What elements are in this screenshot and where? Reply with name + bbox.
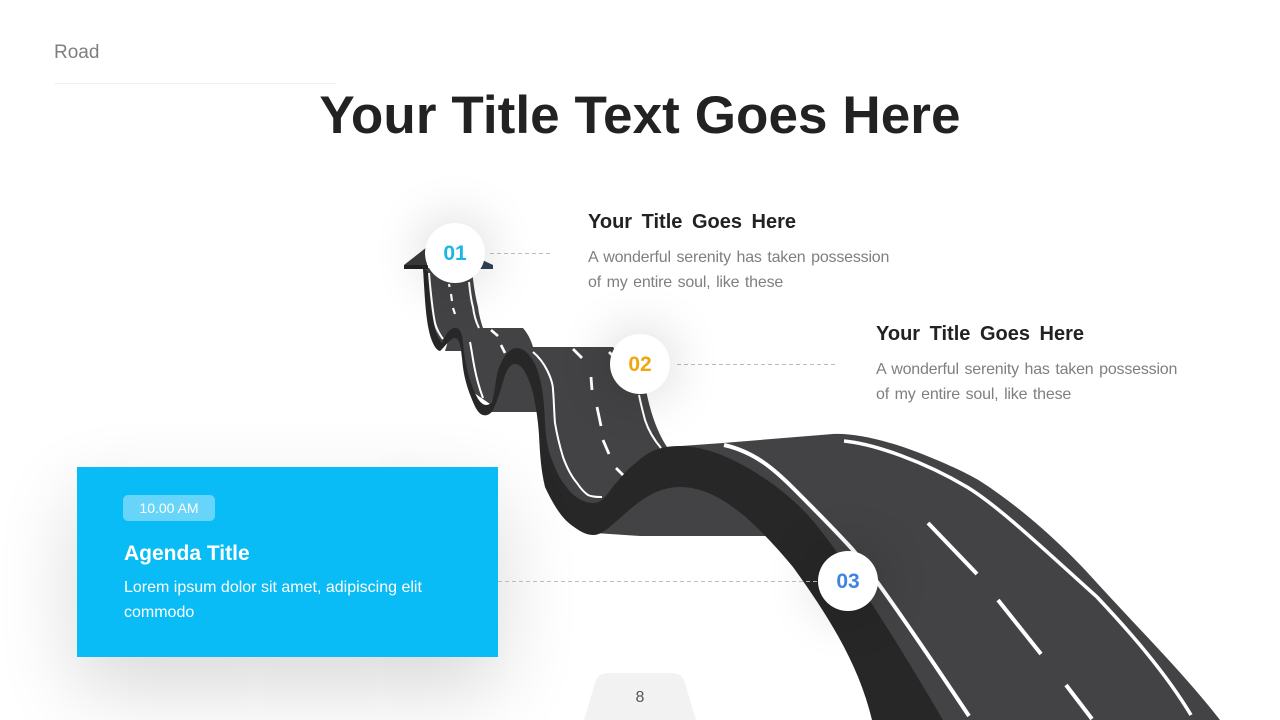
- marker 01: [425, 223, 485, 283]
- body 02: of my entire soul, like these: [876, 386, 1071, 403]
- connector 01: [490, 253, 552, 254]
- lane lines large: [724, 441, 1191, 719]
- body 01: A wonderful serenity has taken possession: [588, 249, 889, 266]
- connector 03: [498, 581, 818, 582]
- panel: agenda card: [77, 467, 498, 657]
- title: Your Title Text Goes Here: [319, 86, 961, 145]
- body 01: of my entire soul, like these: [588, 274, 783, 291]
- road surface: [423, 268, 1220, 720]
- marker 02: 02: [628, 353, 652, 376]
- time pill: [123, 495, 215, 521]
- road dark side ribbon: [423, 268, 943, 720]
- agenda body: Lorem ipsum dolor sit amet, adipiscing elit: [124, 579, 422, 596]
- page number: 8: [636, 689, 644, 706]
- heading 02: Your Title Goes Here: [876, 323, 1084, 345]
- agenda heading: Agenda Title: [124, 542, 250, 565]
- time pill: 10.00 AM: [139, 500, 199, 516]
- arrow head: [404, 247, 493, 269]
- text block 01: [588, 211, 889, 291]
- body 02: [876, 361, 1177, 403]
- body 01: [588, 249, 889, 291]
- agenda body: [124, 579, 422, 621]
- marker 03: 03: [836, 570, 860, 593]
- arch undersides: [445, 335, 770, 536]
- page number tab: [584, 673, 696, 720]
- section label: Road: [54, 42, 99, 63]
- connector 02: [677, 364, 835, 365]
- agenda body: commodo: [124, 604, 194, 621]
- body 02: A wonderful serenity has taken possession: [876, 361, 1177, 378]
- lane lines small: [429, 273, 661, 497]
- marker 02: [610, 334, 670, 394]
- heading 01: Your Title Goes Here: [588, 211, 796, 233]
- marker 01: 01: [443, 242, 467, 265]
- marker 03: [818, 551, 878, 611]
- text block 02: [876, 323, 1177, 403]
